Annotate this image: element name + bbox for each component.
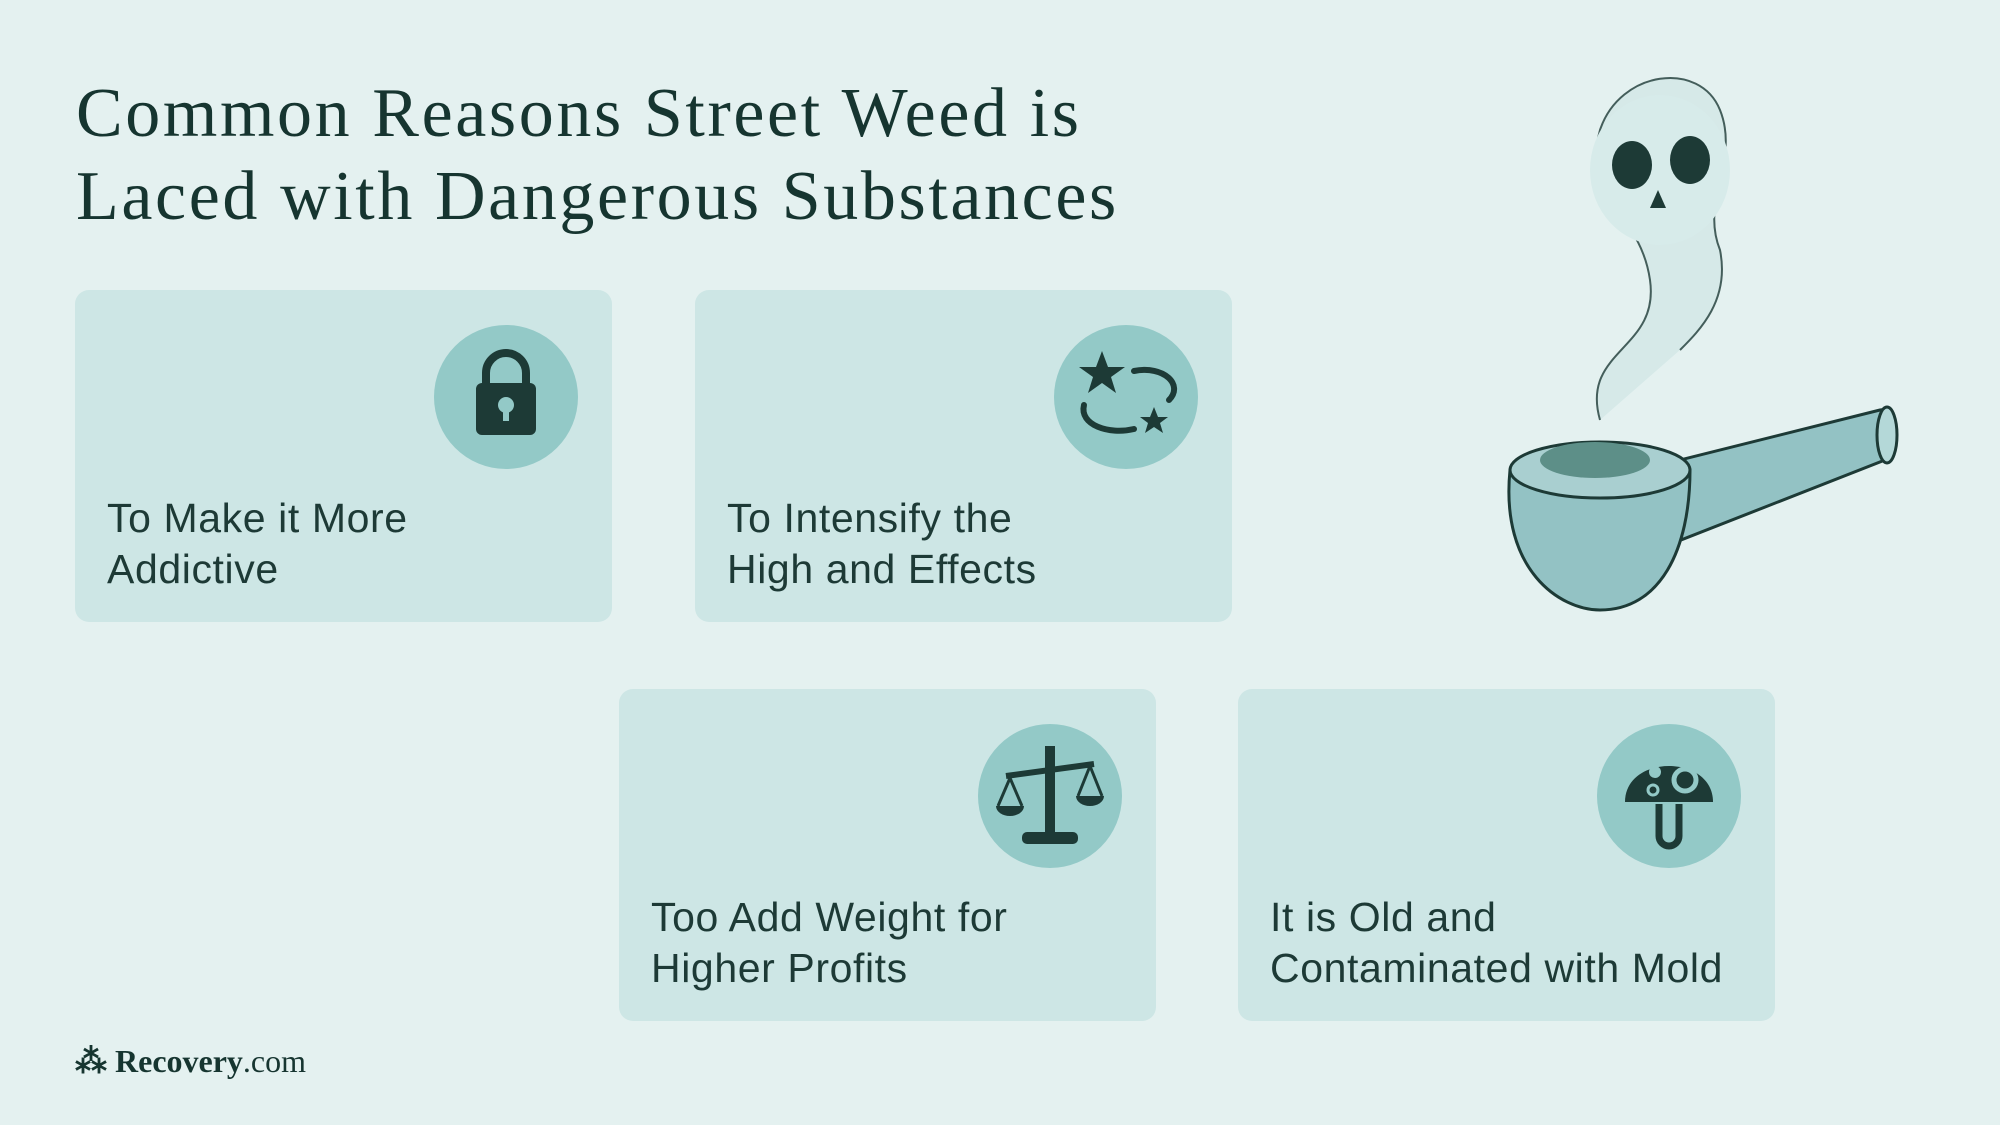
text: It is Old and <box>1270 894 1497 940</box>
title <box>76 75 1119 235</box>
icon: scale <box>978 724 1122 868</box>
illustration: pipe with skull smoke <box>1507 77 1898 612</box>
text: Contaminated with Mold <box>1270 945 1723 991</box>
card: mold <box>1238 689 1775 1021</box>
text: High and Effects <box>727 546 1037 592</box>
text <box>727 495 1037 592</box>
text <box>651 894 1007 991</box>
card: intensify <box>695 290 1232 622</box>
icon: mushroom <box>1597 724 1741 868</box>
text: To Make it More <box>107 495 408 541</box>
text: Too Add Weight for <box>651 894 1007 940</box>
icon: stars <box>1054 325 1198 469</box>
logo: ⁂ Recovery.com <box>75 1043 306 1079</box>
card: addictive <box>75 290 612 622</box>
text: Higher Profits <box>651 945 908 991</box>
icon: lock <box>434 325 578 469</box>
text: Addictive <box>107 546 279 592</box>
text <box>107 495 408 592</box>
text: To Intensify the <box>727 495 1012 541</box>
text <box>1270 894 1723 991</box>
title: Laced with Dangerous Substances <box>76 158 1119 235</box>
card: weight <box>619 689 1156 1021</box>
title: Common Reasons Street Weed is <box>76 75 1082 152</box>
